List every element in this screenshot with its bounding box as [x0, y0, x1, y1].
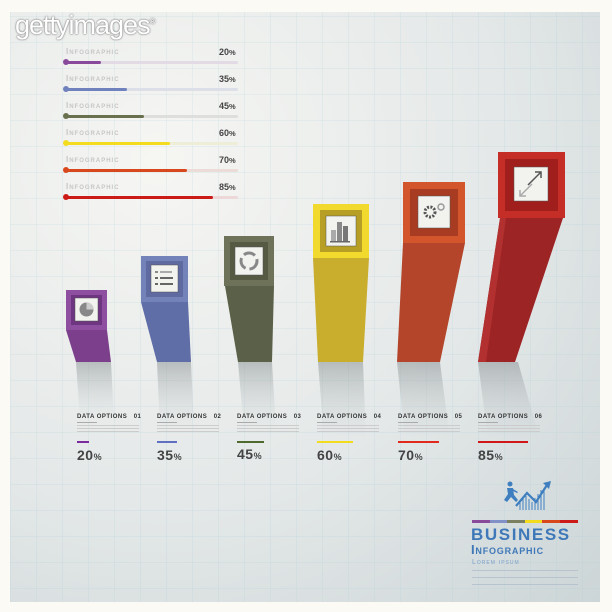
reflections [76, 362, 540, 440]
item 05: 70% [398, 447, 423, 463]
icon: bar chart [326, 216, 356, 246]
icon: gears [418, 196, 450, 228]
item 05: DATA OPTIONS 05 [398, 414, 462, 420]
bar 5 orange [397, 182, 465, 362]
data options row [77, 414, 542, 463]
row 85% [63, 182, 238, 200]
item 01: DATA OPTIONS 01 [77, 414, 141, 420]
item 03: DATA OPTIONS 03 [237, 414, 301, 420]
progress list: Infographic [66, 47, 120, 56]
item 02: 35% [157, 447, 182, 463]
progress list: 85% [219, 182, 236, 192]
item 02: DATA OPTIONS 02 [157, 414, 221, 420]
item 04 [317, 414, 381, 463]
item 01 [77, 414, 141, 463]
item 04: 60% [317, 447, 342, 463]
item 06: DATA OPTIONS 06 [478, 414, 542, 420]
row 45% [63, 101, 238, 119]
row 20% [63, 47, 238, 65]
row 60% [63, 128, 238, 146]
progress list: 35% [219, 74, 236, 84]
icon: recycle [235, 247, 263, 275]
icon: list [151, 265, 178, 292]
icon: runner with growth chart [504, 481, 551, 510]
row 35% [63, 74, 238, 92]
item 02 [157, 414, 221, 463]
progress list: 45% [219, 101, 236, 111]
business infographic title block: Infographic [471, 542, 544, 557]
progress list: Infographic [66, 101, 120, 110]
progress list: Infographic [66, 74, 120, 83]
progress list: 20% [219, 47, 236, 57]
item 04: DATA OPTIONS 04 [317, 414, 381, 420]
business infographic title block: Lorem ipsum [472, 559, 520, 566]
progress list: 60% [219, 128, 236, 138]
bar 4 yellow [313, 204, 369, 362]
item 01: 20% [77, 447, 102, 463]
icon: arrows [514, 167, 548, 201]
business infographic title block [471, 481, 578, 585]
bar 6 red [478, 152, 565, 362]
progress list: Infographic [66, 182, 120, 191]
progress list: Infographic [66, 155, 120, 164]
progress list: Infographic [66, 128, 120, 137]
watermark: getty logo: gettyimages® [15, 10, 154, 40]
progress list: 70% [219, 155, 236, 165]
row 70% [63, 155, 238, 173]
color strip [472, 520, 578, 523]
item 06: 85% [478, 447, 503, 463]
bar 1 purple [66, 290, 111, 362]
item 03 [237, 414, 301, 462]
item 06 [478, 414, 542, 463]
item 05 [398, 414, 462, 463]
item 03: 45% [237, 446, 262, 462]
heading: BUSINESS [471, 525, 571, 544]
progress list [63, 47, 238, 200]
bar 2 blue [141, 256, 191, 362]
icon: pie chart [75, 298, 98, 321]
bar 3 olive [224, 236, 274, 362]
